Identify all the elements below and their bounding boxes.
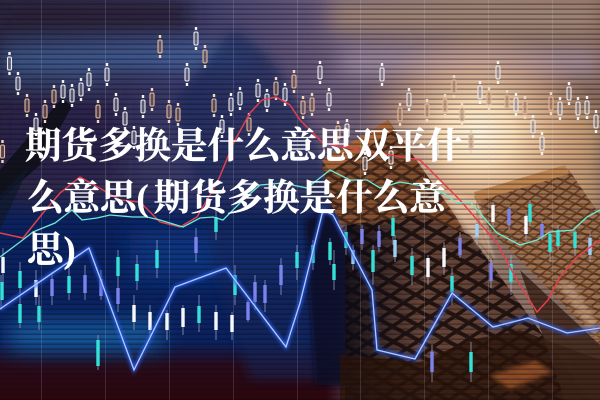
building: central dark tiled facade [345, 215, 590, 400]
blue glowing line [0, 210, 600, 370]
dark diagonal beam [0, 98, 72, 200]
white bodies [3, 205, 526, 332]
candle wicks [1, 200, 590, 382]
building: left tiled roof [322, 120, 480, 300]
red line [0, 97, 600, 312]
building: right tiled block [474, 170, 600, 345]
dark tower silhouette [175, 30, 345, 380]
lower left navy and dark red field [0, 190, 370, 400]
hollow candlesticks [0, 27, 598, 175]
title line 3: 思) [27, 229, 76, 270]
solid candlesticks [1, 200, 590, 382]
title line 2: 么意思(期货多换是什么意 [27, 177, 447, 218]
light blue bodies [353, 224, 590, 264]
sky glow streak between towers [440, 190, 495, 262]
building: lower right dark block [520, 270, 600, 400]
title [25, 125, 463, 270]
building: dark lower band [340, 330, 600, 400]
building: right block side [476, 200, 494, 262]
purple bodies [52, 209, 542, 372]
building: right roof edge [474, 165, 569, 201]
building: facade shadow [345, 225, 420, 400]
dark tower shaft [305, 200, 382, 385]
building: roof edge [322, 120, 394, 172]
title line 1: 期货多换是什么意思双平什 [25, 125, 463, 166]
building: tan light streak [556, 282, 597, 340]
teal line [0, 170, 600, 257]
cyan bodies [2, 204, 575, 372]
building: orange reflected patch [490, 360, 552, 390]
sun glow [356, 30, 600, 240]
